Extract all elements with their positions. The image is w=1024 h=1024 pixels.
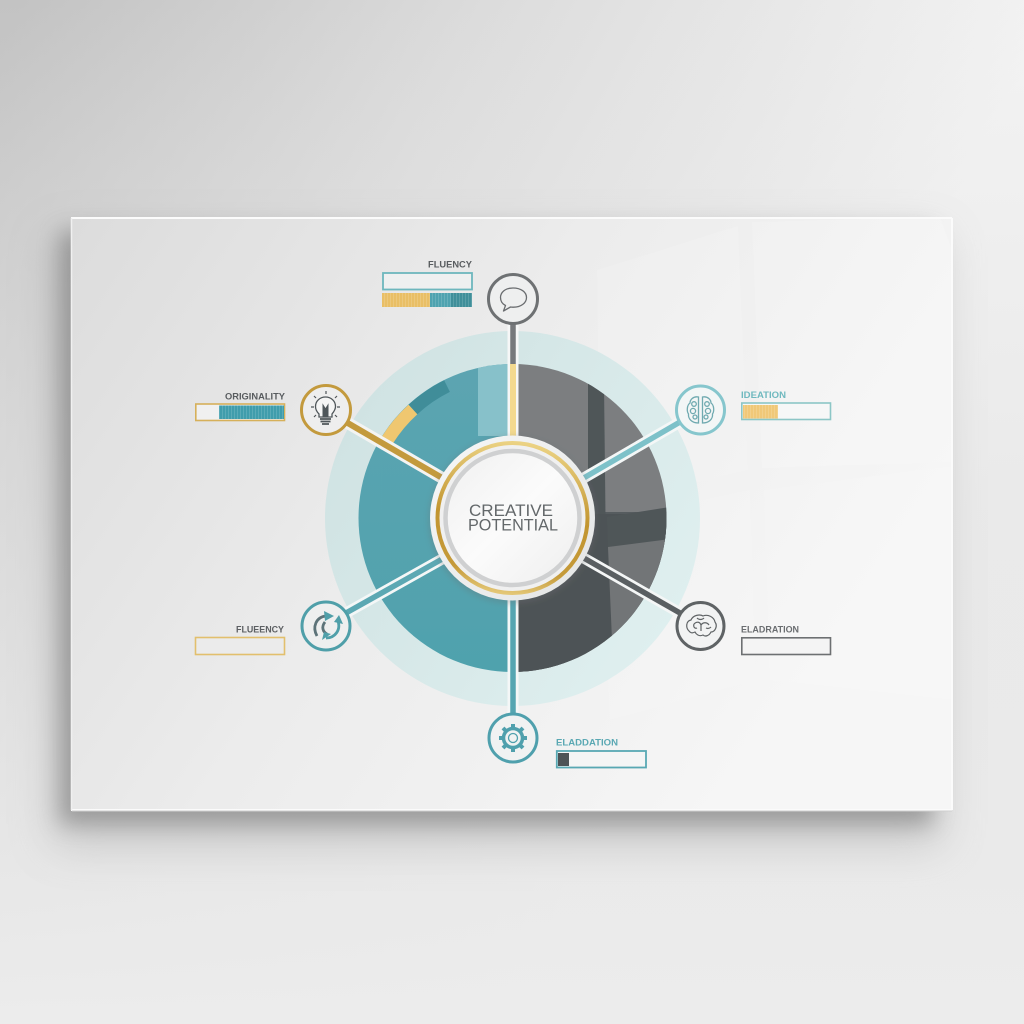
segment: yellow arc: [388, 409, 413, 440]
node: eladdation: [489, 714, 646, 768]
panel shadow: [52, 232, 942, 845]
connector: lower left: [346, 558, 444, 613]
label: ELADRATION: [741, 624, 799, 636]
center hub: POTENTIAL: [468, 516, 558, 534]
connector: bottom: [508, 596, 518, 714]
label: FLUENCY: [428, 260, 473, 270]
connector: upper left: [346, 422, 444, 479]
glass panel: [71, 217, 952, 811]
connector: lower right: [582, 557, 680, 613]
label: ELADDATION: [556, 738, 618, 748]
empty bar: [383, 273, 472, 290]
outer halo ring: [325, 331, 700, 706]
icon: brain front view: [676, 386, 724, 434]
icon: light bulb: [302, 386, 350, 434]
node: top fluency: [382, 260, 538, 324]
center title: CREATIVE: [469, 502, 553, 520]
connector: upper right: [582, 422, 680, 479]
center hub: [428, 436, 596, 604]
node: originality: [196, 386, 350, 434]
segment: dark teal arc: [413, 386, 447, 409]
label: ORIGINALITY: [225, 392, 286, 402]
icon: cycle arrows: [302, 602, 350, 650]
node: lower left fluency: [196, 602, 350, 654]
empty bar: [196, 638, 284, 654]
node: eladration: [677, 602, 830, 654]
progress bar: [742, 403, 830, 420]
label: IDEATION: [741, 390, 786, 401]
stacked bar: [382, 293, 472, 307]
connector: top: [508, 322, 518, 440]
icon: brain side view: [677, 602, 724, 650]
icon: gear: [489, 714, 537, 762]
pie: teal half: [350, 360, 508, 680]
empty bar: [742, 638, 830, 654]
window reflection: [597, 217, 952, 720]
progress bar: [196, 404, 284, 420]
node: ideation: [676, 386, 830, 434]
radial diagram: [325, 322, 700, 714]
pie: grey half: [518, 360, 670, 682]
icon: speech bubble: [488, 274, 538, 324]
progress bar: [557, 751, 646, 768]
label: FLUEENCY: [236, 624, 285, 636]
